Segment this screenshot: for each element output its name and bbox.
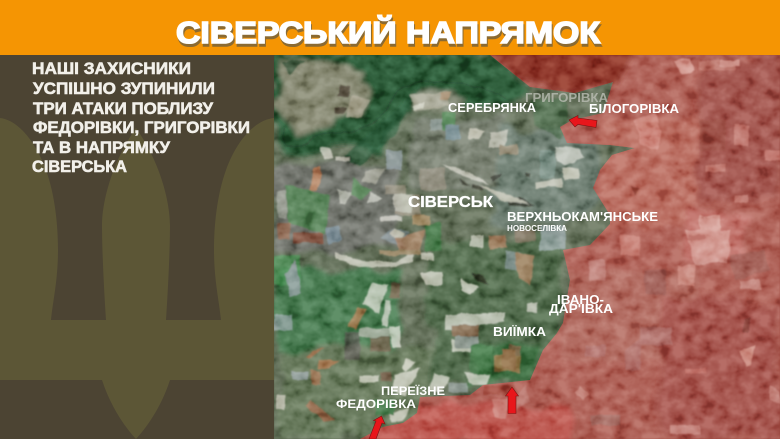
label: Vyimka: ВИЇМКА	[493, 324, 546, 339]
text block: summary: ТА В НАПРЯМКУ	[33, 139, 171, 157]
arrow: Hryhorivka attack	[569, 116, 597, 128]
label: Fedorivka: ФЕДОРІВКА	[336, 397, 416, 411]
text block: summary: ТРИ АТАКИ ПОБЛИЗУ	[33, 100, 214, 118]
map labels	[336, 91, 679, 411]
label: Novoselivka: НОВОСЕЛІВКА	[507, 223, 567, 233]
occupied territory overlay	[360, 40, 780, 439]
text block: summary: ФЕДОРІВКИ, ГРИГОРІВКИ	[33, 119, 250, 137]
label: Ivano-Darivka: ІВАНО-	[557, 293, 604, 307]
title: СІВЕРСЬКИЙ НАПРЯМОК	[176, 14, 600, 50]
field patches NW	[282, 60, 305, 75]
text block: summary: СІВЕРСЬКА	[32, 158, 127, 176]
map texture	[274, 55, 780, 439]
icon: trident watermark	[0, 118, 274, 439]
label: Ivano-Darivka	[549, 293, 613, 316]
title: СІВЕРСЬКИЙ НАПРЯМОК	[177, 17, 601, 53]
arrow: south attack	[506, 387, 518, 414]
header bar	[0, 0, 780, 55]
label: Siversk: СІВЕРСЬК	[408, 194, 493, 211]
south-west fields	[335, 252, 414, 268]
label: Ivano-Darivka: ДАР'ІВКА	[549, 302, 613, 316]
south-central fields	[420, 272, 442, 285]
text block: summary: УСПІШНО ЗУПИНИЛИ	[33, 80, 215, 98]
label: Hryhorivka: ГРИГОРІВКА	[525, 91, 608, 105]
label: Pereizne: ПЕРЕЇЗНЕ	[381, 383, 445, 398]
label: Serebrianka: СЕРЕБРЯНКА	[448, 101, 536, 115]
text block: summary: НАШІ ЗАХИСНИКИ	[32, 60, 191, 78]
panel: text background	[0, 55, 274, 439]
label: Verkhnokamianske: ВЕРХНЬОКАМ'ЯНСЬКЕ	[507, 210, 658, 224]
text block: summary	[32, 60, 250, 176]
Siversk / central fields	[410, 92, 450, 112]
satellite map	[274, 55, 634, 439]
arrow: Fedorivka attack	[369, 416, 385, 439]
label: Bilohorivka: БІЛОГОРІВКА	[589, 102, 679, 116]
